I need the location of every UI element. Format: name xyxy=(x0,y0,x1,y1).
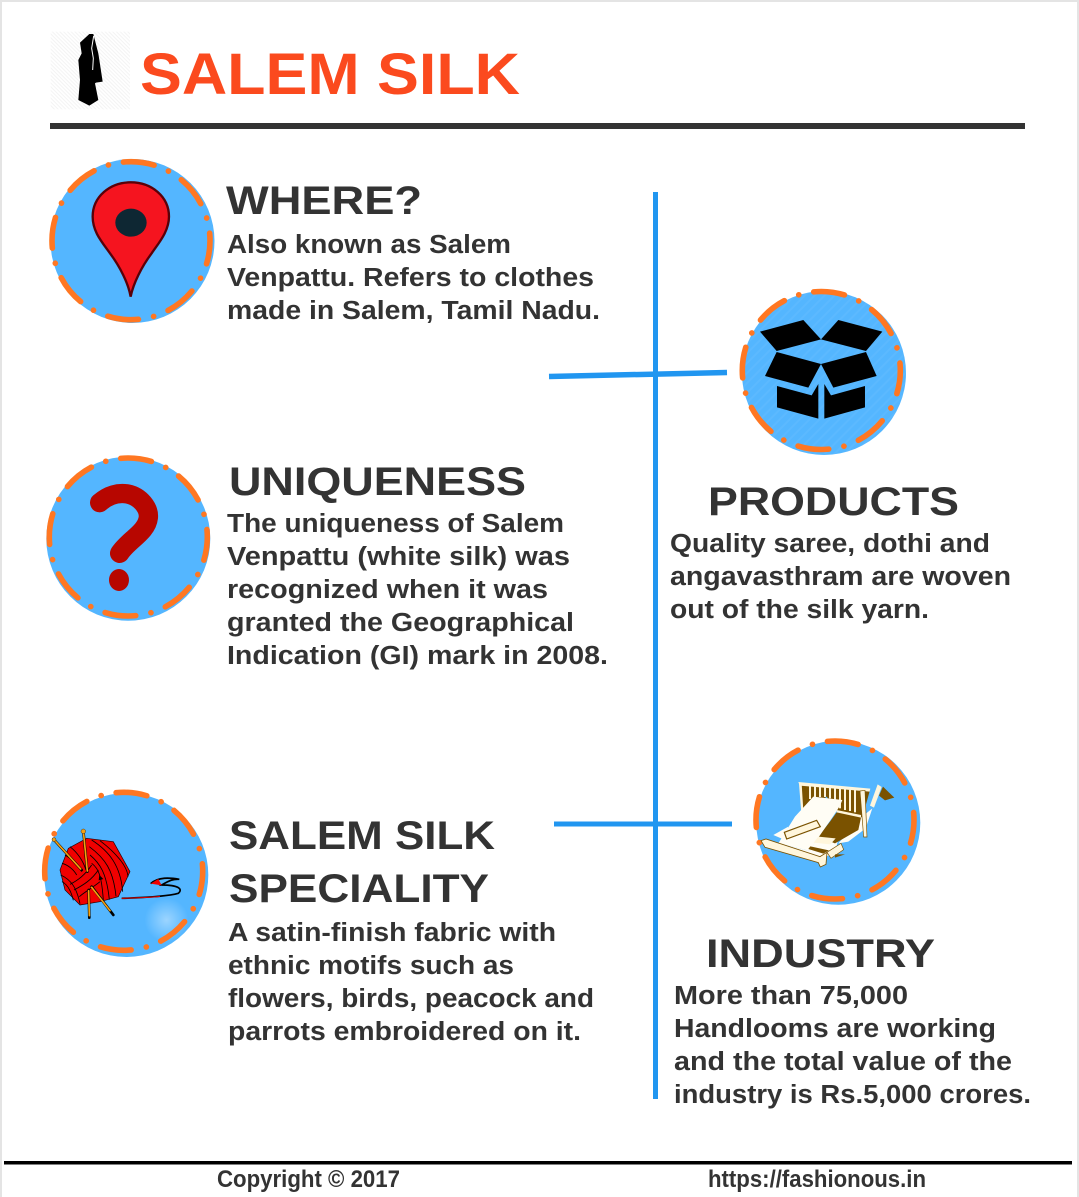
heading: industry: INDUSTRY xyxy=(706,932,935,976)
text: uniqueness: granted the Geographical xyxy=(227,609,574,637)
text: industry xyxy=(674,982,1031,1109)
heading: uniqueness: UNIQUENESS xyxy=(229,460,526,504)
timeline: vertical and branch connectors xyxy=(549,192,732,1099)
icon: saree silhouette xyxy=(51,32,130,109)
text: uniqueness: Venpattu (white silk) was xyxy=(227,543,570,571)
text: where: made in Salem, Tamil Nadu. xyxy=(227,297,600,325)
title rule xyxy=(50,123,1025,129)
text: speciality: A satin-finish fabric with xyxy=(228,919,556,947)
heading: salem silk speciality: SALEM SILK xyxy=(229,814,495,858)
icon: location pin badge xyxy=(45,154,217,327)
text: uniqueness xyxy=(227,510,608,670)
text: where: Venpattu. Refers to clothes xyxy=(227,264,594,292)
icon: handloom badge xyxy=(749,734,921,906)
text: uniqueness: The uniqueness of Salem xyxy=(227,510,564,538)
footer: copyright: Copyright © 2017 xyxy=(217,1166,400,1193)
text: industry: More than 75,000 xyxy=(674,982,908,1010)
text: speciality: ethnic motifs such as xyxy=(228,952,514,980)
text: industry: and the total value of the xyxy=(674,1048,1012,1076)
icon: question mark badge xyxy=(42,451,215,623)
text: where xyxy=(227,231,600,325)
text: speciality: flowers, birds, peacock and xyxy=(228,985,594,1013)
text: where: Also known as Salem xyxy=(227,231,511,259)
text: products: Quality saree, dothi and xyxy=(670,530,990,558)
icon: open box badge xyxy=(735,284,908,457)
heading: salem silk speciality: SPECIALITY xyxy=(229,867,489,911)
icon: yarn ball badge xyxy=(37,785,210,958)
footer: website: https://fashionous.in xyxy=(708,1166,926,1193)
heading: products: PRODUCTS xyxy=(708,480,959,524)
text: speciality: parrots embroidered on it. xyxy=(228,1018,581,1046)
text: industry: Handlooms are working xyxy=(674,1015,996,1043)
footer rule xyxy=(4,1161,1072,1164)
text: products: angavasthram are woven xyxy=(670,563,1011,591)
text: industry: industry is Rs.5,000 crores. xyxy=(674,1081,1031,1109)
heading: where: WHERE? xyxy=(226,179,422,223)
text: speciality xyxy=(228,919,594,1046)
title: SALEM SILK xyxy=(140,42,520,107)
text: uniqueness: recognized when it was xyxy=(227,576,548,604)
text: products xyxy=(670,530,1011,624)
heading: salem silk speciality xyxy=(229,814,495,911)
text: uniqueness: Indication (GI) mark in 2008. xyxy=(227,642,608,670)
text: products: out of the silk yarn. xyxy=(670,596,929,624)
